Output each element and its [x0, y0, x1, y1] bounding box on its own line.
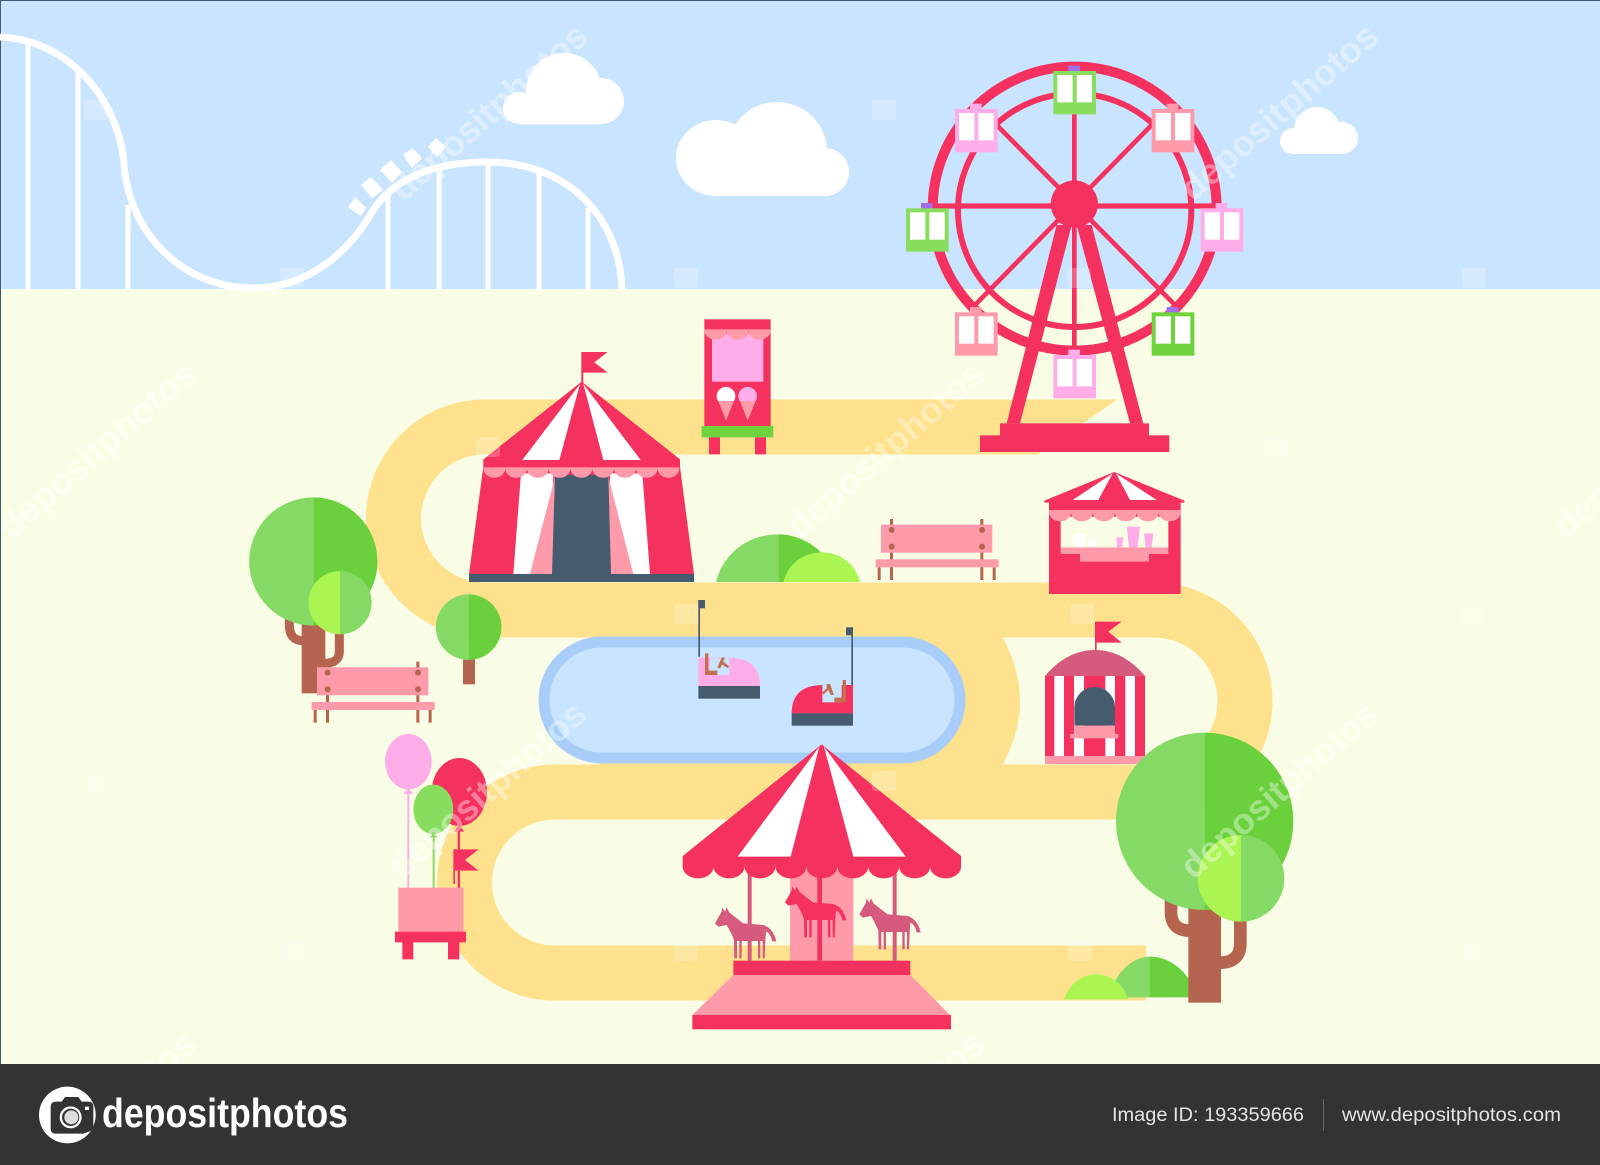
carousel steps	[692, 975, 950, 1015]
stand window	[712, 333, 763, 382]
gondola bottom right	[1152, 307, 1194, 356]
horse left	[715, 907, 776, 958]
tent flag	[581, 352, 608, 383]
stall items	[1073, 527, 1153, 547]
balloon box	[398, 888, 463, 932]
stall body	[1049, 502, 1181, 594]
horse right	[859, 898, 921, 949]
tent white panels	[513, 473, 650, 574]
tent body	[469, 467, 694, 574]
balloon strings	[405, 788, 411, 888]
carousel poles	[748, 870, 897, 961]
watermarks: depositphotos	[380, 693, 594, 886]
gondola top left	[955, 104, 998, 152]
snack stall	[1044, 472, 1184, 594]
stand body	[704, 319, 771, 427]
red balloon	[432, 758, 487, 888]
ice cream stand	[702, 319, 773, 454]
stall roof	[1044, 472, 1184, 503]
roller coaster	[0, 37, 622, 290]
gondola left	[906, 203, 949, 252]
tent door	[552, 475, 611, 574]
stall roof stripes	[1073, 473, 1157, 500]
carousel canopy	[683, 744, 961, 878]
right big tree	[1116, 733, 1293, 1003]
green balloon	[413, 785, 453, 888]
footer website: www.depositphotos.com	[1341, 1105, 1561, 1126]
gondola bottom left	[955, 307, 998, 356]
gondola right	[1201, 203, 1243, 252]
stall window	[1061, 517, 1168, 548]
ferris wheel supports and base	[980, 180, 1169, 452]
tent base	[469, 574, 694, 582]
carousel canopy stripes	[738, 747, 906, 857]
tent roof	[483, 382, 680, 467]
carousel base	[692, 1015, 951, 1029]
bench upper	[876, 519, 999, 580]
stand shelf	[702, 426, 773, 437]
bush middle	[716, 534, 860, 582]
watermarks: depositphotos	[1172, 15, 1386, 208]
watermarks: depositphotos	[1172, 693, 1386, 886]
gondola bottom	[1053, 350, 1096, 398]
tent scallop trim	[483, 467, 679, 478]
watermarks: depositphotos	[778, 353, 992, 546]
horse centre	[785, 886, 846, 937]
ice cream cones	[717, 387, 757, 421]
footer logo text: depositphotos	[102, 1090, 348, 1136]
tent curtains	[530, 477, 633, 574]
footer bar	[0, 1064, 1600, 1165]
pink balloon	[385, 734, 432, 794]
cloud right	[1280, 107, 1358, 154]
bush lower right	[1064, 957, 1192, 999]
tent roof stripes	[522, 384, 641, 460]
bumper cars	[698, 600, 1145, 764]
sky background	[0, 0, 1600, 290]
bumper car pink	[698, 600, 760, 699]
ground background	[0, 289, 1600, 1065]
gondola top	[1053, 66, 1096, 114]
ticket booth	[1045, 622, 1145, 764]
ferris wheel frame	[933, 67, 1217, 351]
stall awning	[1049, 510, 1181, 521]
carousel platform	[733, 961, 910, 975]
left big tree	[249, 497, 377, 693]
lake	[544, 642, 960, 758]
balloons stand	[385, 734, 487, 959]
stand legs	[709, 437, 766, 454]
footer divider	[1323, 1099, 1324, 1131]
cloud middle	[676, 102, 849, 202]
horse mane	[798, 891, 813, 902]
gondola top right	[1152, 104, 1194, 152]
circus tent	[469, 352, 694, 582]
carousel column	[790, 870, 853, 961]
balloon flag	[453, 849, 479, 884]
bumper car red	[792, 627, 853, 726]
ferris wheel	[906, 66, 1243, 452]
carousel	[683, 744, 961, 1029]
watermarks: depositphotos	[382, 15, 596, 208]
small tree	[436, 594, 501, 684]
cloud left	[503, 53, 624, 129]
watermark camera marks	[84, 100, 1486, 961]
carousel centre pole	[817, 870, 822, 961]
bench lower	[312, 662, 435, 723]
stand awning	[704, 329, 771, 340]
winding yellow path	[393, 399, 1245, 973]
balloon table	[395, 932, 466, 959]
stall counter	[1061, 547, 1168, 562]
footer image id: Image ID: 193359666	[1112, 1105, 1304, 1126]
footer logo icon	[39, 1087, 96, 1143]
